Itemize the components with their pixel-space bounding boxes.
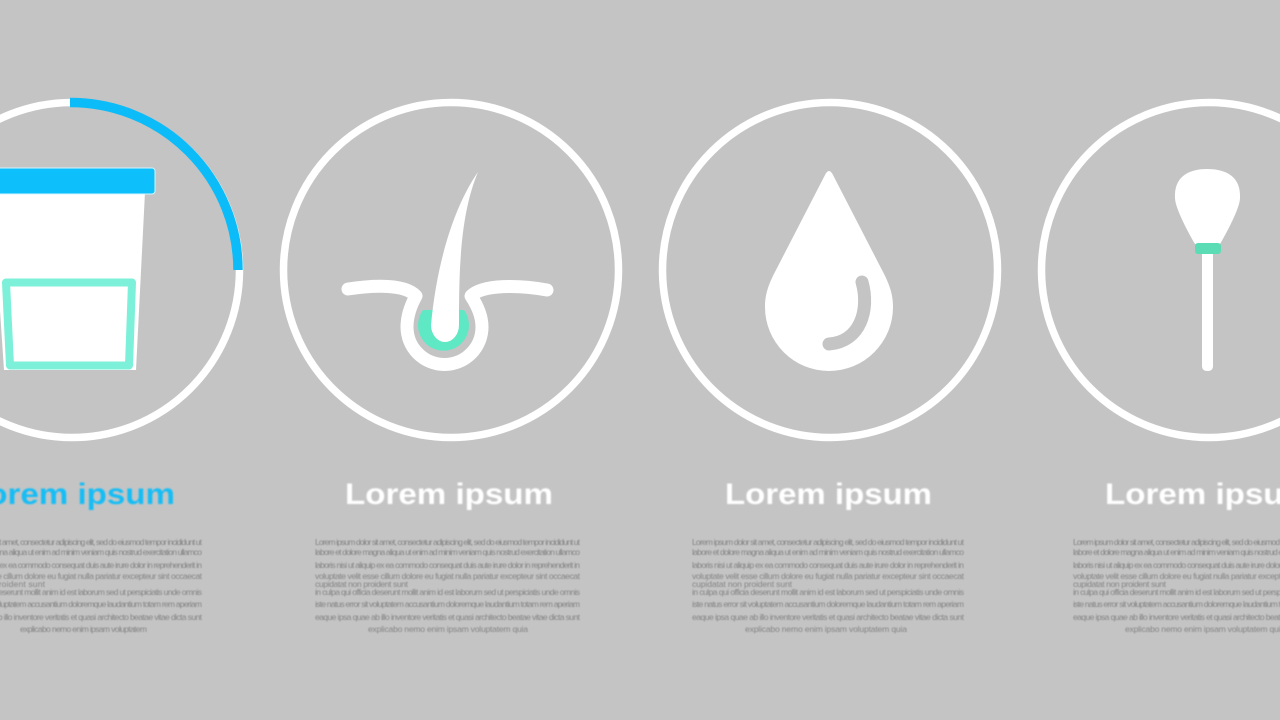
text block 3: eaque ipsa quae ab illo inventore veritatis et quasi architecto beatae vitae dicta sunt — [692, 612, 965, 622]
text block 1: explicabo nemo enim ipsam voluptatem — [20, 624, 147, 634]
text block 3 — [692, 537, 965, 634]
text block 2: explicabo nemo enim ipsam voluptatem quia — [368, 624, 528, 634]
panel: step 1 cup (active) — [0, 102, 240, 634]
text block 3: cupidatat non proident sunt — [692, 579, 793, 589]
text block 3: in culpa qui officia deserunt mollit anim id est laborum sed ut perspiciatis unde omnis — [692, 587, 964, 597]
heading 2: Lorem ipsum — [345, 478, 553, 511]
text block 3: iste natus error sit voluptatem accusantium doloremque laudantium totam rem aperiam — [692, 599, 964, 609]
text block 2: laboris nisi ut aliquip ex ea commodo consequat duis aute irure dolor in reprehenderit in — [315, 560, 580, 570]
text block 4 — [1073, 537, 1280, 634]
panel: step 3 drop — [662, 102, 998, 634]
text block 3: labore et dolore magna aliqua ut enim ad minim veniam quis nostrud exercitation ullamco — [692, 547, 964, 557]
icon: cotton swab — [1175, 169, 1240, 371]
text block 2: iste natus error sit voluptatem accusantium doloremque laudantium totam rem aperiam — [315, 599, 580, 609]
text block 3: voluptate velit esse cillum dolore eu fugiat nulla pariatur excepteur sint occaecat — [692, 571, 965, 581]
panel: step 2 hair follicle — [284, 102, 618, 634]
text block 2: eaque ipsa quae ab illo inventore veritatis et quasi architecto beatae vitae dicta sunt — [315, 612, 581, 622]
progress arc — [70, 102, 238, 270]
icon: specimen cup — [0, 168, 155, 370]
text block 3: laboris nisi ut aliquip ex ea commodo consequat duis aute irure dolor in reprehenderit in — [692, 560, 964, 570]
circle ring 3 — [662, 102, 998, 438]
heading 3: Lorem ipsum — [725, 478, 932, 511]
text block 3: explicabo nemo enim ipsam voluptatem quia — [745, 624, 907, 634]
text block 2: labore et dolore magna aliqua ut enim ad minim veniam quis nostrud exercitation ullamco — [315, 547, 580, 557]
text block 1 — [0, 537, 203, 634]
text block 3: Lorem ipsum dolor sit amet, consectetur adipiscing elit, sed do eiusmod tempor incididunt ut — [692, 537, 965, 547]
text block 2: voluptate velit esse cillum dolore eu fugiat nulla pariatur excepteur sint occaecat — [315, 571, 581, 581]
circle ring 4 — [1042, 102, 1280, 438]
circle ring 1 — [0, 102, 240, 438]
text block 2: in culpa qui officia deserunt mollit anim id est laborum sed ut perspiciatis unde omnis — [315, 587, 580, 597]
text block 2: cupidatat non proident sunt — [315, 579, 409, 589]
text block 4: cupidatat non proident sunt — [1073, 579, 1167, 589]
circle ring 2 — [284, 102, 618, 438]
icon: drop — [765, 171, 893, 371]
text block 2 — [315, 537, 581, 634]
icon: hair follicle — [348, 172, 547, 364]
text block 2: Lorem ipsum dolor sit amet, consectetur adipiscing elit, sed do eiusmod tempor incididunt ut — [315, 537, 581, 547]
panel: step 4 swab — [1042, 102, 1280, 634]
